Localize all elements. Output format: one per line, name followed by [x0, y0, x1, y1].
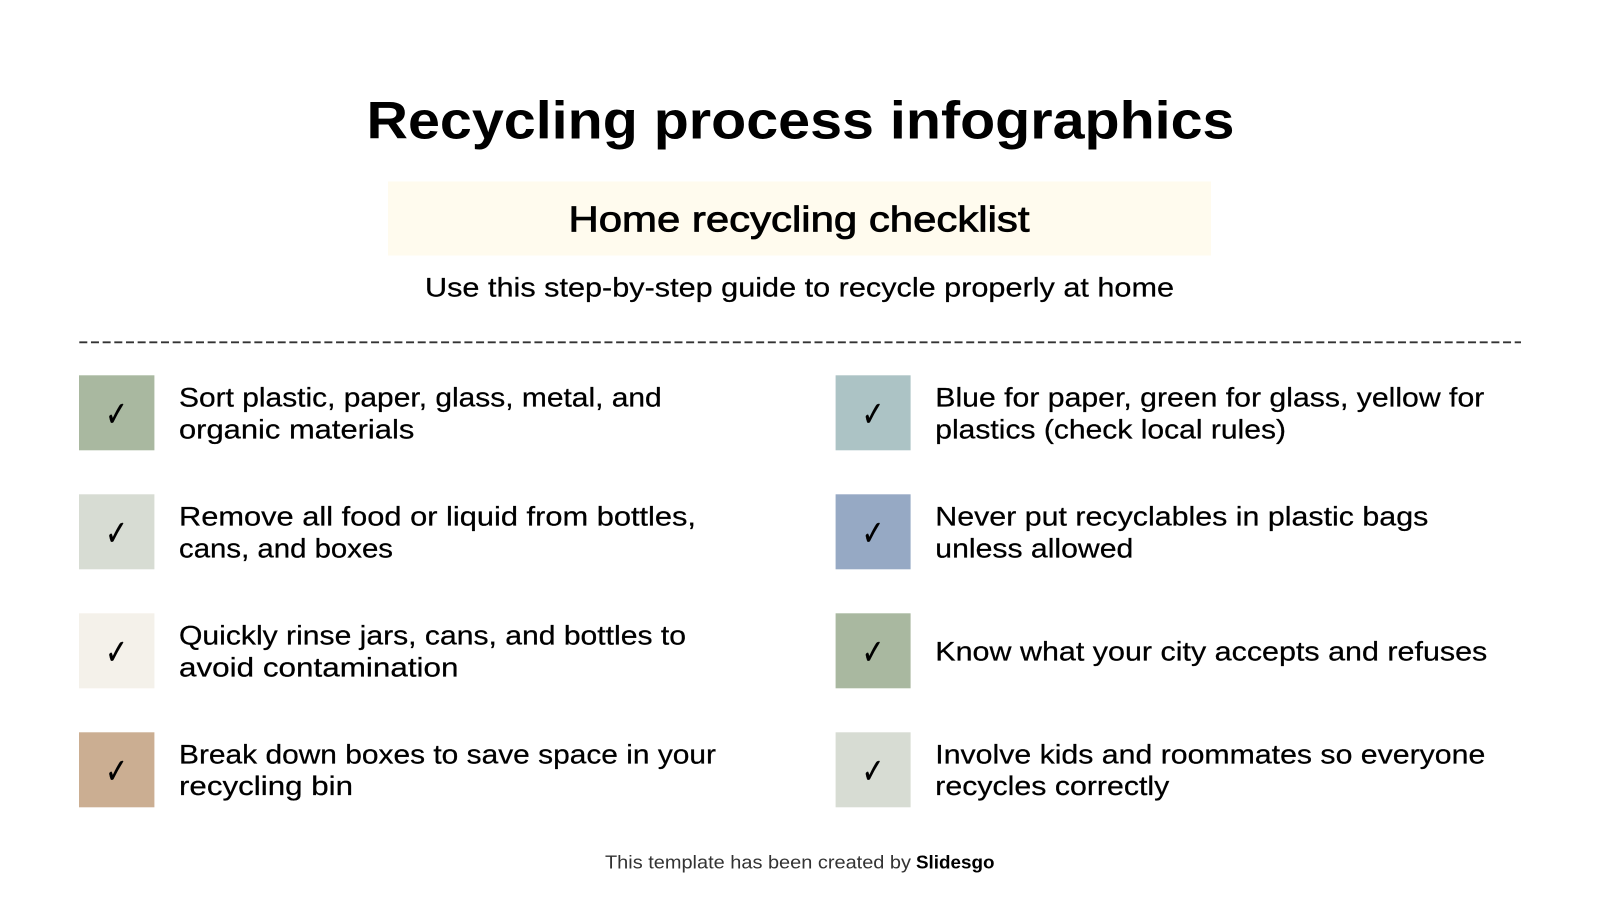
checklist item: city rules	[836, 613, 1487, 688]
checkbox: blue	[836, 494, 911, 569]
checkbox: pale sage: ✓	[862, 751, 884, 792]
item text	[935, 383, 1484, 444]
checklist item: sort	[79, 375, 662, 450]
checklist item: rinse	[79, 613, 686, 688]
item text: avoid contamination	[179, 652, 458, 682]
checkbox: teal: ✓	[862, 394, 884, 435]
checkbox: green: ✓	[862, 632, 884, 673]
item text: Know what your city accepts and refuses	[935, 636, 1487, 666]
checkbox: green	[79, 375, 154, 450]
checkbox: green: ✓	[105, 394, 128, 435]
footer credit	[605, 851, 994, 872]
item text	[179, 383, 662, 444]
checkbox: pale sage: ✓	[105, 513, 128, 554]
checkbox: green	[836, 613, 911, 688]
checkbox: teal	[836, 375, 911, 450]
checklist item: involve	[836, 732, 1485, 807]
checklist item: bags	[836, 494, 1428, 569]
banner: subtitle	[388, 182, 1211, 256]
item text: Break down boxes to save space in your	[179, 739, 716, 769]
item text: Sort plastic, paper, glass, metal, and	[179, 383, 662, 413]
item text: cans, and boxes	[179, 534, 393, 564]
title: Recycling process infographics	[366, 92, 1234, 150]
item text: recycling bin	[179, 771, 353, 801]
banner: subtitle: Home recycling checklist	[568, 199, 1030, 240]
item text: plastics (check local rules)	[935, 414, 1286, 444]
item text: Never put recyclables in plastic bags	[935, 501, 1428, 531]
item text	[179, 501, 696, 564]
item text	[935, 739, 1485, 801]
checkbox: cream	[79, 613, 154, 688]
item text: organic materials	[179, 414, 414, 444]
checklist item: remove	[79, 494, 696, 569]
checkbox: cream: ✓	[105, 632, 128, 673]
item text	[179, 620, 686, 682]
item text	[179, 739, 716, 801]
checkbox: pale sage	[836, 732, 911, 807]
checkbox: pale sage	[79, 494, 154, 569]
checklist item: colours	[836, 375, 1484, 450]
item text: Blue for paper, green for glass, yellow for	[935, 383, 1484, 413]
checkbox: tan	[79, 732, 154, 807]
footer credit: This template has been created by	[605, 852, 911, 872]
footer credit: Slidesgo	[916, 851, 994, 872]
item text: unless allowed	[935, 534, 1133, 564]
item text	[935, 501, 1428, 564]
item text: Remove all food or liquid from bottles,	[179, 501, 696, 531]
intro text: Use this step-by-step guide to recycle properly at home	[425, 273, 1174, 303]
item text: Quickly rinse jars, cans, and bottles to	[179, 620, 686, 650]
checkbox: tan: ✓	[105, 751, 128, 792]
item text: Involve kids and roommates so everyone	[935, 739, 1485, 769]
checkbox: blue: ✓	[862, 513, 884, 554]
item text: recycles correctly	[935, 771, 1170, 801]
checklist item: break down	[79, 732, 716, 807]
